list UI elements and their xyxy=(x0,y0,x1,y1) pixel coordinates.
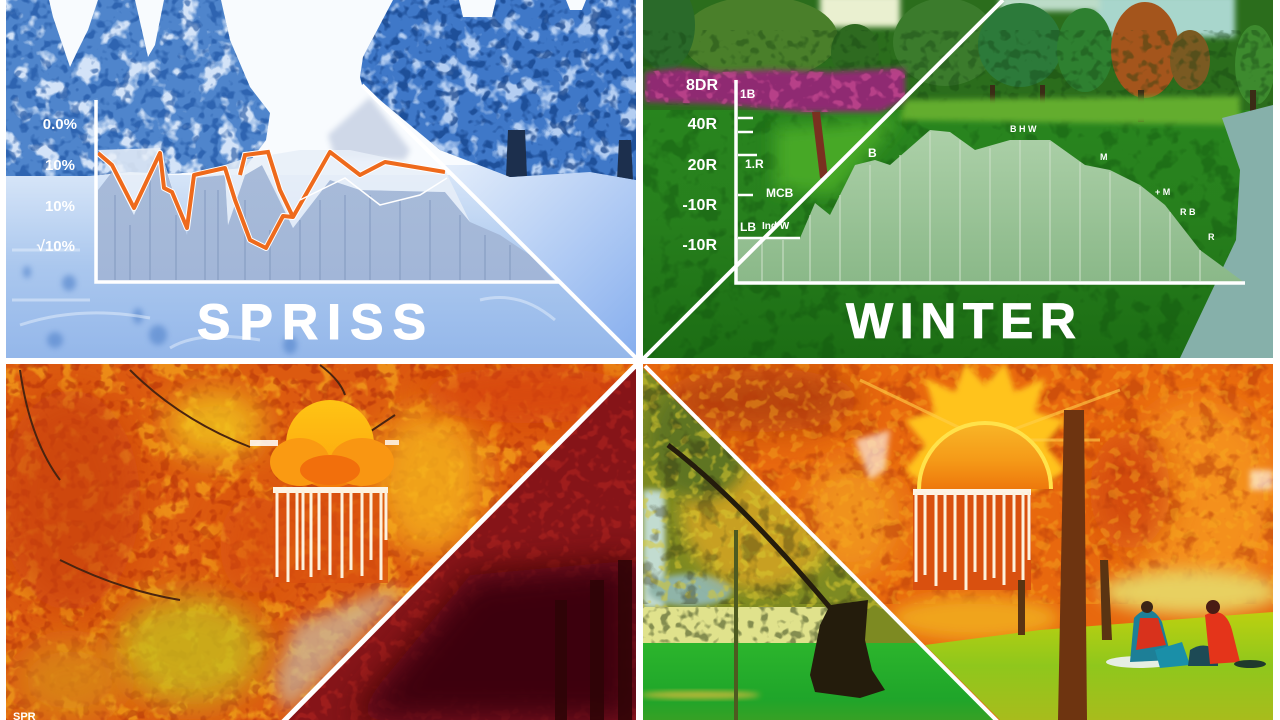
small chart annotations: M xyxy=(1100,152,1108,162)
small chart annotations xyxy=(740,87,1215,242)
tree branches xyxy=(20,365,395,600)
background trees xyxy=(635,0,1275,130)
right autumn foliage xyxy=(643,364,1280,640)
chart axes xyxy=(96,100,560,282)
misty tree behind the chart xyxy=(328,97,410,160)
diagonal divider xyxy=(281,364,637,720)
panel: green park scene labelled WINTER xyxy=(635,0,1275,358)
small chart annotations: 1B xyxy=(740,87,756,101)
picnic couple xyxy=(1106,600,1266,668)
small chart annotations: R xyxy=(1208,232,1215,242)
panel: autumn park bottom right xyxy=(640,362,1280,720)
lawn band behind the trees xyxy=(900,96,1240,125)
magenta flowering shrubs xyxy=(645,68,905,178)
chart y-axis labels: 0.0% xyxy=(43,116,77,133)
meadow xyxy=(925,612,1273,720)
foliage colour patches xyxy=(0,364,640,720)
chart axes xyxy=(736,80,1245,283)
snow footprints xyxy=(23,266,297,354)
misty path xyxy=(275,590,405,712)
small chart annotations: R B xyxy=(1180,207,1196,217)
sun xyxy=(860,362,1120,489)
left park scene xyxy=(640,364,1003,720)
chart y-axis labels: √10% xyxy=(37,238,75,255)
small chart annotations: LB xyxy=(740,220,756,234)
small chart annotations: Ind W xyxy=(762,221,790,232)
bar chart xyxy=(273,487,388,583)
small chart annotations: B H W xyxy=(1010,124,1037,134)
small chart annotations: 1.R xyxy=(745,157,764,171)
white foliage glints xyxy=(855,430,1273,490)
season title: SPRISS xyxy=(197,294,426,350)
small chart annotations: MCB xyxy=(766,186,794,200)
chart labels: -10R xyxy=(682,237,717,254)
chart labels: -10R xyxy=(682,197,717,214)
season title: WINTER xyxy=(846,293,1076,349)
diagonal divider xyxy=(645,366,1000,720)
panel: snowy scene labelled SPRISS xyxy=(6,0,640,358)
small chart annotations: + M xyxy=(1155,187,1170,197)
chart labels xyxy=(682,77,718,254)
chart labels: 8DR xyxy=(686,77,718,94)
bar chart xyxy=(913,489,1031,590)
tree trunk xyxy=(1058,410,1087,720)
chart y-axis labels: 10% xyxy=(45,157,75,174)
chart: green area xyxy=(736,80,1245,283)
diagonal divider: top right panel xyxy=(643,0,1003,359)
chart labels: 20R xyxy=(688,157,717,174)
garden path xyxy=(1180,105,1273,358)
panel: autumn foliage bottom left xyxy=(0,364,640,720)
chart labels: 40R xyxy=(688,116,717,133)
snow drift strokes xyxy=(12,250,555,348)
sun xyxy=(250,400,399,488)
small chart annotations: B xyxy=(868,146,877,160)
snow-covered fir trees, left group xyxy=(6,0,271,180)
chart: line and area xyxy=(96,100,560,282)
chart y-axis labels: 10% xyxy=(45,198,75,215)
snow-covered fir trees, right group xyxy=(355,0,640,185)
diagonal divider: top left panel xyxy=(362,85,637,359)
dark red avenue xyxy=(285,364,636,720)
sky patches xyxy=(820,0,1235,37)
chart y-axis labels xyxy=(37,116,77,255)
